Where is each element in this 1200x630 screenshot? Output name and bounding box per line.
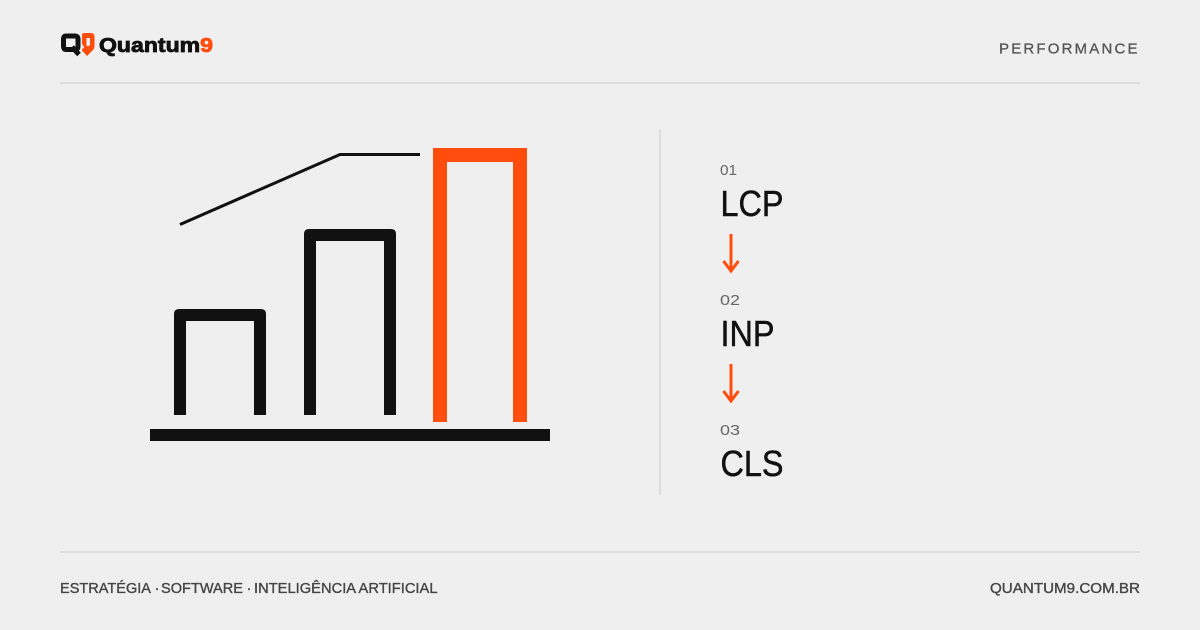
- metrics list: [720, 162, 784, 484]
- arrow 1: [724, 234, 738, 271]
- header: [64, 33, 1138, 58]
- logo mark: [64, 33, 94, 56]
- arrow 2: [724, 364, 738, 401]
- footer: [60, 580, 1140, 597]
- metric 01 LCP: LCP: [720, 183, 784, 224]
- bar 2: [304, 229, 396, 415]
- metric 01 LCP: 01: [720, 162, 737, 179]
- logo: [64, 33, 213, 57]
- footer tagline: ·: [246, 580, 252, 597]
- footer tagline: SOFTWARE: [161, 580, 243, 597]
- footer tagline: ESTRATÉGIA: [60, 580, 151, 597]
- metric 02 INP: [720, 292, 774, 354]
- category label: PERFORMANCE: [999, 40, 1138, 58]
- bar 3 highlighted: [440, 155, 520, 422]
- metric 02 INP: INP: [720, 313, 774, 354]
- metric 01 LCP: [720, 162, 784, 224]
- footer tagline: INTELIGÊNCIA ARTIFICIAL: [254, 580, 438, 597]
- footer tagline: ·: [154, 580, 160, 597]
- metric 03 CLS: [720, 422, 784, 484]
- metric 02 INP: 02: [720, 292, 740, 309]
- bar 1: [174, 309, 266, 415]
- baseline: [150, 429, 550, 441]
- trend line: [180, 154, 420, 224]
- logo wordmark: Quantum 9: [99, 35, 213, 57]
- metric 03 CLS: 03: [720, 422, 740, 439]
- metric 03 CLS: CLS: [720, 443, 784, 484]
- chart illustration: [150, 154, 550, 441]
- footer url: QUANTUM9.COM.BR: [990, 580, 1140, 597]
- footer tagline: [60, 580, 438, 597]
